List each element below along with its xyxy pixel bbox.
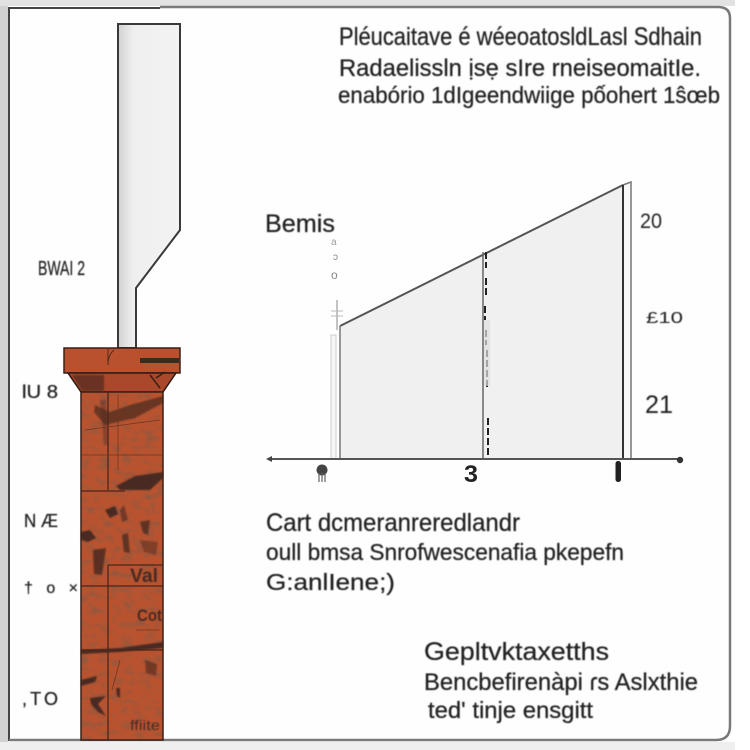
middle paragraph: oull bmsa Snrofwescenafia pkepefn [266, 539, 624, 565]
value labels: 20 [640, 210, 662, 233]
chart mid divider [483, 252, 490, 459]
chart right edge [622, 185, 624, 459]
x axis [266, 456, 683, 463]
middle paragraph [266, 509, 624, 595]
column height labels: BWAI 2 [38, 258, 85, 280]
bottom paragraph: Gepltvktaxetths [424, 638, 609, 666]
bottom paragraph: Bencbefirenàpi ɾs Aslxthie [424, 669, 698, 696]
chart left ruler: o [331, 268, 338, 282]
chart slope line [340, 185, 623, 326]
chart edge strip [623, 182, 631, 459]
value labels [640, 210, 683, 419]
middle paragraph: G:anlIene;) [266, 569, 395, 595]
column inscriptions: ffiite [130, 717, 160, 733]
axis marker right [616, 461, 621, 482]
chart left ruler [331, 237, 343, 459]
bottom paragraph: ted' tinje ensgitt [428, 697, 594, 723]
brick column [64, 348, 180, 740]
top paragraph [338, 23, 720, 108]
column inscriptions: Cot [137, 606, 162, 625]
chart title: Bemis [265, 210, 335, 238]
axis marker left [316, 464, 328, 482]
top paragraph: Pléucaitave é wéeoatosldLasl Sdhain [339, 23, 702, 51]
column height labels: ,TO [22, 689, 58, 709]
chart left edge [339, 326, 341, 459]
column height labels [22, 258, 85, 709]
chart left ruler: ɔ [333, 252, 338, 263]
column inscriptions: Val [130, 566, 158, 587]
chart left ruler: a [331, 237, 337, 248]
column height labels: N Æ [24, 511, 58, 531]
column inscriptions [130, 566, 162, 733]
top paragraph: enabório 1dIgeendwiige pốohert 1ŝœb [338, 82, 720, 108]
tower upper shaft [118, 24, 180, 348]
area chart [265, 182, 683, 488]
middle paragraph: Cart dcmeranreredlandr [266, 509, 520, 537]
value labels: £10 [646, 310, 683, 327]
column shaft [81, 392, 163, 740]
value labels: 21 [645, 391, 673, 419]
column capital [64, 348, 180, 392]
column height labels: † o × [24, 580, 78, 597]
bottom paragraph [424, 638, 698, 723]
top paragraph: Radaelissln ịsẹ sIre rneiseomaitIe. [339, 55, 701, 82]
chart area [340, 185, 623, 459]
axis label middle: 3 [464, 461, 478, 488]
column height labels: lU 8 [22, 382, 58, 402]
